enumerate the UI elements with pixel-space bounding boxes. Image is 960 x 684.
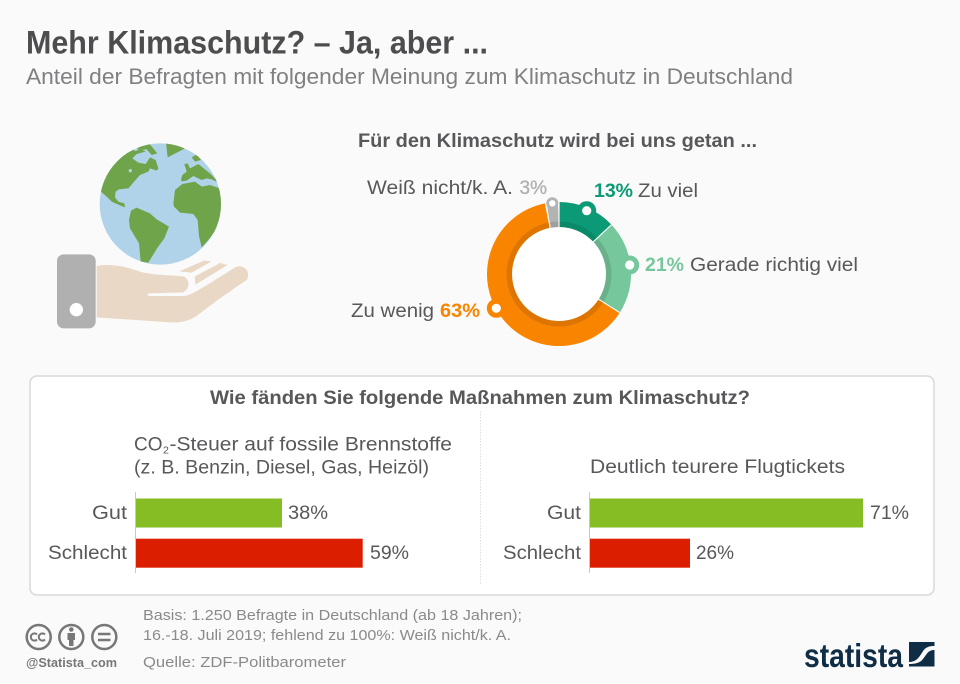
label: gerade richtig viel: Gerade richtig viel [690, 255, 858, 276]
label: zu wenig: Zu wenig [351, 301, 434, 322]
chart heading: flugtickets: Deutlich teurere Flugtickets [590, 457, 845, 478]
panel: massnahmen [30, 376, 934, 595]
donut heading: Für den Klimaschutz wird bei uns getan ... [358, 131, 757, 152]
footnote: basis [143, 607, 522, 644]
bar: gut 71: Gut [547, 503, 582, 524]
bar: gut 38: 38% [288, 503, 328, 524]
segment: zu wenig [487, 203, 620, 346]
chart: co2 steuer [48, 434, 452, 573]
logo: statista: statista [804, 637, 904, 674]
footnote: basis: Basis: 1.250 Befragte in Deutschland (ab 18 Jahren); [143, 607, 522, 624]
footnote: basis: 16.-18. Juli 2019; fehlend zu 100%: Weiß nicht/k. A. [143, 627, 511, 644]
bar: schlecht 59: 59% [370, 543, 409, 564]
label: zu wenig [351, 301, 480, 322]
icon: hand holding globe [57, 140, 248, 328]
label: weiss nicht: 3% [520, 178, 547, 199]
globe [100, 143, 221, 265]
label: zu viel [594, 181, 698, 202]
chart heading: co2 steuer: 2 [163, 444, 169, 456]
bar: gut 38: Gut [92, 503, 128, 524]
label: gerade richtig viel: 21% [645, 255, 684, 276]
hand [57, 254, 248, 328]
segment: zu viel [559, 201, 612, 242]
label: zu viel: 13% [594, 181, 633, 202]
label: zu viel: Zu viel [638, 181, 698, 202]
bar: gut 38 [92, 498, 328, 528]
bar: schlecht 26: 26% [696, 543, 734, 564]
segment: weiss nicht [546, 197, 559, 228]
chart heading: co2 steuer: (z. B. Benzin, Diesel, Gas, Heizöl) [134, 458, 429, 478]
label: weiss nicht: Weiß nicht/k. A. [367, 178, 513, 199]
label: zu wenig: 63% [440, 301, 480, 322]
bar: schlecht 26: Schlecht [503, 543, 582, 564]
segment: gerade richtig viel [593, 225, 639, 313]
chart heading: co2 steuer: CO [134, 434, 162, 456]
chart heading: co2 steuer [134, 434, 452, 478]
donut chart [487, 197, 639, 346]
bar: schlecht 59: Schlecht [48, 543, 128, 564]
bar: gut 71 [547, 498, 909, 528]
title: Mehr Klimaschutz? – Ja, aber ... [26, 24, 488, 60]
bar: schlecht 59 [48, 539, 409, 568]
chart heading: co2 steuer: -Steuer auf fossile Brennstoffe [170, 434, 452, 456]
bar: gut 71: 71% [870, 503, 909, 524]
icon: creative commons [27, 625, 116, 649]
chart: flugtickets [503, 457, 909, 573]
bar: schlecht 26 [503, 539, 734, 568]
source: Quelle: ZDF-Politbarometer [143, 654, 346, 671]
panel heading: Wie fänden Sie folgende Maßnahmen zum Klimaschutz? [210, 388, 750, 409]
handle: @Statista_com [26, 656, 117, 670]
subtitle: Anteil der Befragten mit folgender Meinung zum Klimaschutz in Deutschland [26, 64, 793, 89]
